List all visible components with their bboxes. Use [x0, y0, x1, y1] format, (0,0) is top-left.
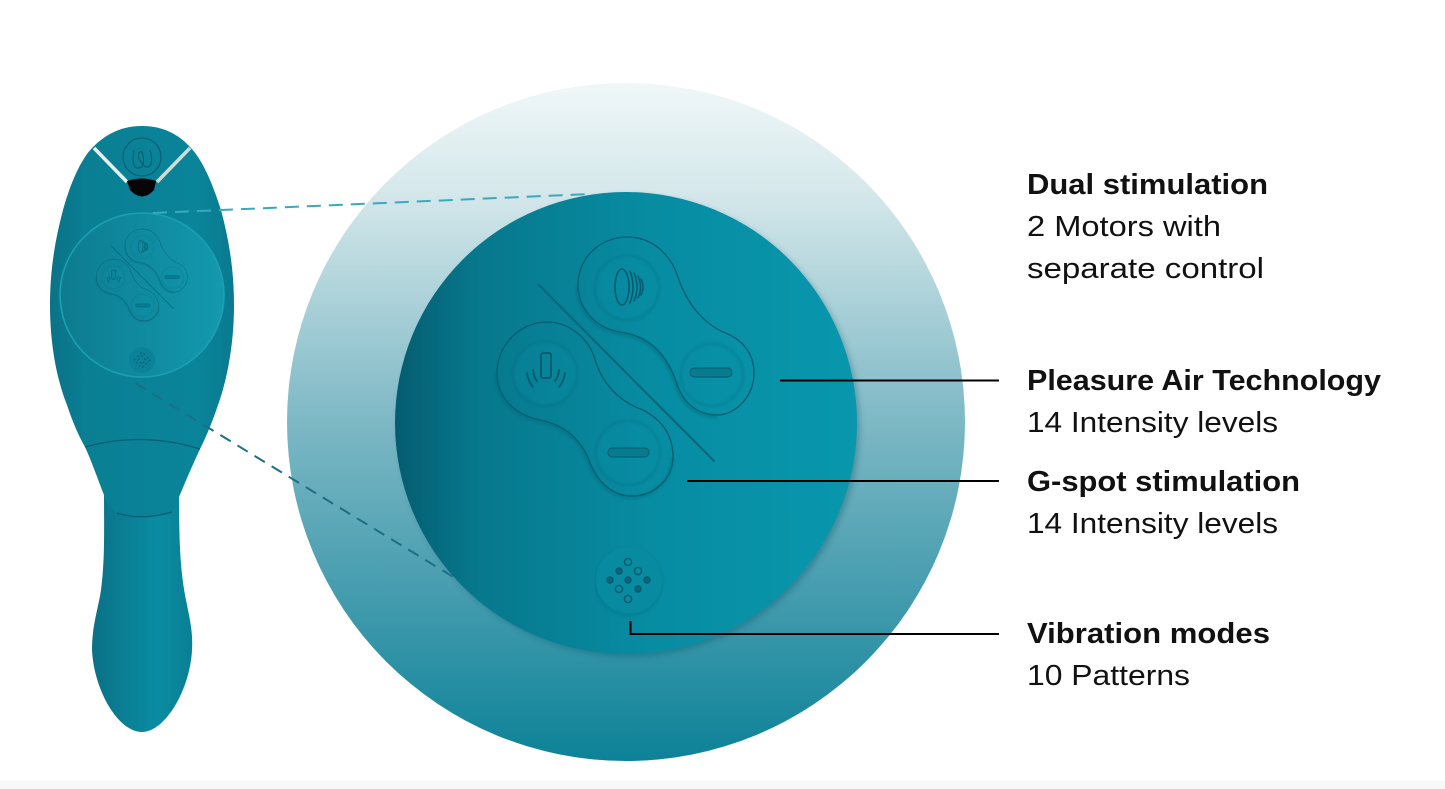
label: vibration modes — [1027, 618, 1270, 692]
label: g-spot stimulation — [1027, 466, 1300, 540]
dashed connector top — [153, 194, 590, 213]
label: vibration modes: Vibration modes — [1027, 618, 1270, 650]
label: dual stimulation: Dual stimulation — [1027, 169, 1268, 201]
vibration button — [596, 547, 662, 615]
label: vibration modes: 10 Patterns — [1027, 660, 1190, 692]
label: pleasure air technology — [1027, 365, 1381, 439]
label: g-spot stimulation: G-spot stimulation — [1027, 466, 1300, 498]
leader line: g-spot — [687, 480, 999, 482]
leader line: pleasure air — [780, 380, 999, 382]
label: pleasure air technology: Pleasure Air Technology — [1027, 365, 1381, 397]
top logo button — [123, 138, 161, 176]
label: pleasure air technology: 14 Intensity levels — [1027, 407, 1278, 439]
large gradient halo circle — [287, 83, 965, 761]
zoomed control disc — [395, 192, 860, 657]
control capsules with buttons — [496, 237, 754, 498]
seams — [85, 439, 200, 517]
leader line: vibration — [630, 621, 999, 634]
label: g-spot stimulation: 14 Intensity levels — [1027, 508, 1278, 540]
label: dual stimulation: separate control — [1027, 253, 1264, 285]
opening notch — [94, 148, 190, 196]
head body — [50, 126, 234, 517]
bottom strip — [0, 781, 1445, 789]
label: dual stimulation — [1027, 169, 1268, 285]
shaft — [92, 490, 192, 732]
product illustration — [50, 126, 234, 732]
label: dual stimulation: 2 Motors with — [1027, 211, 1221, 243]
mini control disc — [60, 213, 224, 377]
dashed connector bottom — [135, 383, 455, 578]
